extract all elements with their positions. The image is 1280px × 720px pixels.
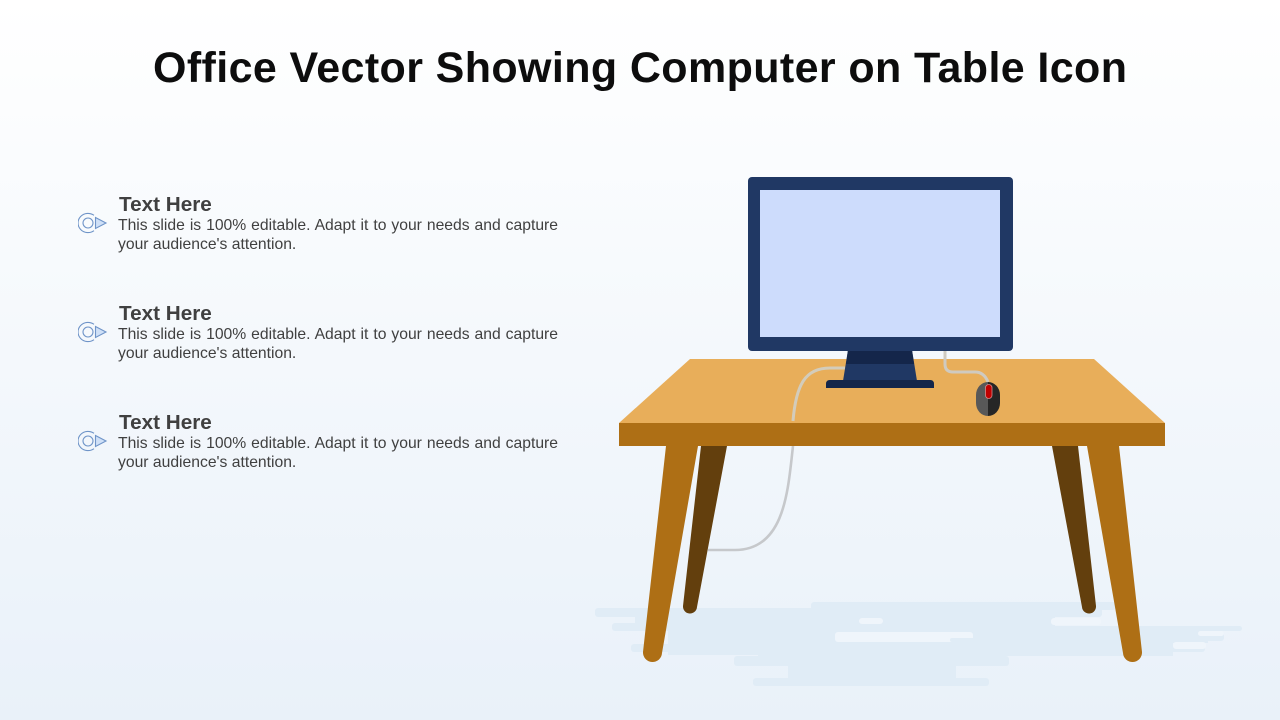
monitor screen	[760, 190, 1000, 337]
floor shadow	[595, 602, 1242, 686]
body line 2b: your audience's attention.	[118, 345, 296, 362]
cable left on table	[793, 368, 845, 421]
table front edge	[619, 423, 1165, 446]
table front leg right	[1087, 446, 1142, 662]
cable under table	[708, 446, 793, 550]
body line 2a: This slide is 100% editable. Adapt it to your needs and capture	[118, 326, 558, 343]
table back leg right	[1052, 446, 1096, 614]
table back leg left	[683, 446, 727, 614]
body line 1b: your audience's attention.	[118, 236, 296, 253]
body line 3a: This slide is 100% editable. Adapt it to your needs and capture	[118, 435, 558, 452]
monitor frame	[748, 177, 1013, 351]
body line 3b: your audience's attention.	[118, 454, 296, 471]
monitor stand foot	[826, 380, 934, 388]
text block 2	[78, 302, 558, 362]
heading 2: Text Here	[119, 302, 212, 325]
icon: circle arrow 1	[78, 212, 107, 234]
title: Office Vector Showing Computer on Table Icon	[153, 44, 1127, 92]
icon: mouse	[976, 382, 1000, 416]
heading 1: Text Here	[119, 193, 212, 216]
icon: circle arrow 2	[78, 322, 107, 342]
table top	[619, 359, 1165, 423]
text block 1	[78, 193, 558, 253]
icon: circle arrow 3	[78, 430, 107, 452]
heading 3: Text Here	[119, 411, 212, 434]
text block 3	[78, 411, 558, 471]
cable to mouse	[945, 351, 988, 382]
body line 1a: This slide is 100% editable. Adapt it to your needs and capture	[118, 217, 558, 234]
monitor stand neck	[843, 350, 917, 381]
table front leg left	[643, 446, 698, 662]
